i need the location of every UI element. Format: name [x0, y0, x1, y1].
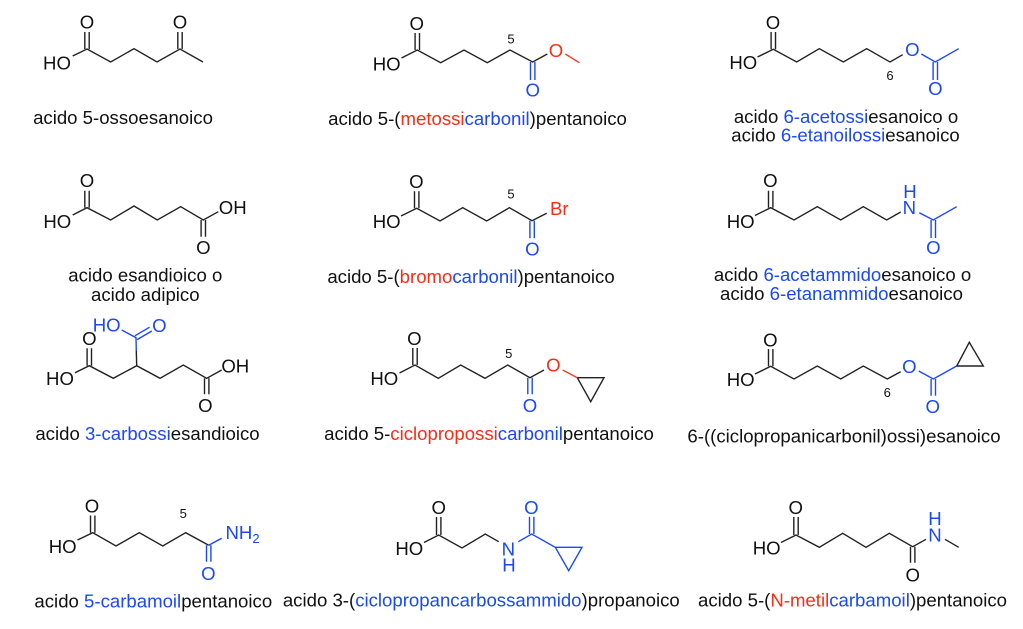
structure: tricarboxylic acid: [46, 314, 249, 416]
structure: primary amide: O: [201, 563, 216, 584]
structure: methyl ester: O: [525, 80, 540, 100]
panel: acetoxy: [729, 12, 960, 145]
structure: adipic acid: O: [80, 170, 94, 191]
name: acido 5-(N-metilcarbamoil)pentanoico: acido 5-(N-metilcarbamoil)pentanoico: [698, 590, 1007, 611]
structure: N-methyl amide: O: [905, 564, 920, 586]
structure: adipic acid: [43, 170, 247, 258]
structure: primary amide: O: [85, 496, 99, 516]
structure: cyclopropanecarboxylate ester: O: [902, 356, 917, 377]
structure: N-methyl amide: HO: [753, 538, 781, 558]
structure: methyl ester: HO: [373, 54, 401, 74]
structure: adipic acid: O: [196, 237, 211, 258]
structure: methyl ester: [373, 13, 579, 100]
structure: acyl bromide: 5: [507, 186, 515, 202]
structure: cyclopropanecarboxamide: [395, 497, 582, 576]
structure: methyl ester: O: [409, 13, 424, 34]
structure: cyclopropyl ester: 5: [505, 346, 512, 361]
structure: primary amide: [49, 496, 260, 584]
structure: adipic acid: OH: [219, 197, 247, 218]
structure: acetoxy ester: [729, 12, 959, 99]
structure: primary amide: HO: [49, 536, 77, 557]
structure: tricarboxylic acid: O: [152, 315, 167, 336]
structure: N-methyl amide: N: [928, 524, 942, 546]
structure: cyclopropyl ester: O: [523, 395, 537, 416]
structure: acetamide: [727, 170, 957, 258]
structure: N-methyl amide: [753, 497, 959, 586]
structure: cyclopropyl ester: HO: [370, 368, 398, 389]
panel: cyclopropanecarboxamido: [283, 497, 680, 611]
name: 6-((ciclopropanicarbonil)ossi)esanoico: 6-((ciclopropanicarbonil)ossi)esanoico: [687, 426, 1001, 447]
structure: cyclopropanecarboxylate ester: 6: [884, 385, 891, 400]
structure: tricarboxylic acid: O: [198, 395, 213, 416]
panel: cyclopropanecarbonyloxy: [687, 330, 1001, 447]
structure: acetoxy ester: O: [928, 78, 943, 99]
name: acido 5-ciclopropossicarbonilpentanoico: acido 5-ciclopropossicarbonilpentanoico: [324, 423, 654, 444]
structure: cyclopropanecarboxamide: H: [502, 554, 516, 576]
structure: acetoxy ester: 6: [886, 68, 894, 83]
structure: 5-oxohexanoic acid: HO: [43, 52, 71, 74]
structure: cyclopropanecarboxamide: HO: [395, 538, 423, 559]
structure: acetoxy ester: O: [905, 39, 920, 60]
name: acido esandioico o acido adipico: acido esandioico o: [68, 265, 222, 286]
name: acido 6-acetossiesanoico o acido 6-etanoilossiesanoico: acido 6-acetossiesanoico o: [734, 106, 958, 127]
structure: 5-oxohexanoic acid: [43, 12, 203, 74]
structure: tricarboxylic acid: O: [82, 328, 97, 349]
structure: cyclopropanecarboxamide: O: [431, 497, 446, 518]
structure: cyclopropyl ester: O: [407, 328, 422, 349]
panel: acetamido: [714, 170, 971, 304]
panel: cyclopropoxycarbonyl: [324, 328, 654, 444]
name: acido 6-acetossiesanoico o acido 6-etanoilossiesanoico: acido 6-etanoilossiesanoico: [731, 124, 960, 146]
structure: acetamide: HO: [727, 211, 755, 232]
structure: acetamide: H: [903, 181, 917, 202]
structure: cyclopropyl ester: [370, 328, 604, 416]
structure: acyl bromide: O: [525, 238, 540, 260]
structure: cyclopropanecarboxylate ester: O: [763, 330, 778, 350]
structure: adipic acid: HO: [43, 211, 71, 232]
name: acido 3-carbossiesandioico: acido 3-carbossiesandioico: [35, 423, 260, 444]
structure: N-methyl amide: H: [928, 508, 942, 529]
structure: tricarboxylic acid: HO: [93, 314, 121, 336]
structure: cyclopropanecarboxylate ester: [727, 330, 983, 417]
structure: acyl bromide: [373, 171, 569, 260]
structure: acetoxy ester: O: [766, 12, 780, 33]
structure: methyl ester: 5: [507, 32, 515, 46]
name: acido 6-acetammidoesanoico o acido 6-etanammidoesanoico: [714, 264, 971, 304]
structure: acetoxy ester: HO: [729, 52, 757, 73]
structure: 5-oxohexanoic acid: O: [173, 12, 187, 32]
name: acido 6-acetammidoesanoico o acido 6-etanammidoesanoico: acido 6-etanammidoesanoico: [720, 283, 963, 304]
structure: primary amide: 5: [180, 506, 187, 521]
name: acido esandioico o acido adipico: acido adipico: [91, 284, 200, 305]
structure: 5-oxohexanoic acid: O: [80, 12, 94, 32]
name: acido 5-(bromocarbonil)pentanoico: acido 5-(bromocarbonil)pentanoico: [327, 266, 615, 287]
panel: N-methylcarbamoyl: [698, 497, 1007, 611]
panel: 5-oxohexanoic acid: [33, 12, 213, 128]
structure: acyl bromide: HO: [373, 211, 401, 232]
structure: cyclopropanecarboxamide: N: [502, 538, 515, 560]
panel: adipic acid: [43, 170, 247, 305]
structure: acetamide: O: [926, 237, 941, 258]
structure: acetamide: O: [763, 170, 778, 191]
name: acido 5-carbamoilpentanoico: acido 5-carbamoilpentanoico: [34, 590, 272, 612]
panel: bromocarbonyl: [327, 171, 615, 287]
panel: methoxycarbonyl: [328, 13, 627, 129]
structure: cyclopropanecarboxylate ester: HO: [727, 369, 755, 390]
structure: cyclopropanecarboxylate ester: O: [925, 396, 940, 417]
structure: tricarboxylic acid: OH: [221, 356, 249, 376]
panel: 3-carboxy: [35, 314, 260, 444]
structure: acyl bromide: Br: [550, 198, 569, 219]
structure: primary amide: 2: [252, 531, 260, 546]
structure: cyclopropanecarboxamide: O: [524, 497, 539, 518]
name: acido 5-ossoesanoico: acido 5-ossoesanoico: [33, 107, 213, 128]
structure: tricarboxylic acid: HO: [46, 368, 74, 389]
name: acido 6-acetammidoesanoico o acido 6-etanammidoesanoico: acido 6-acetammidoesanoico o: [714, 264, 971, 285]
name: acido 5-(metossicarbonil)pentanoico: acido 5-(metossicarbonil)pentanoico: [328, 108, 627, 129]
structure: primary amide: NH: [226, 522, 252, 543]
structure: methyl ester: O: [549, 40, 563, 61]
structure: N-methyl amide: O: [788, 497, 803, 518]
panel: carbamoyl: [34, 496, 272, 612]
name: acido 3-(ciclopropancarbossammido)propanoico: acido 3-(ciclopropancarbossammido)propanoico: [283, 590, 680, 611]
name: acido esandioico o acido adipico: [68, 265, 222, 305]
structure: acetamide: N: [903, 197, 916, 218]
structure: acyl bromide: O: [409, 171, 424, 192]
structure: cyclopropyl ester: O: [546, 354, 561, 376]
name: acido 6-acetossiesanoico o acido 6-etanoilossiesanoico: [731, 106, 960, 146]
